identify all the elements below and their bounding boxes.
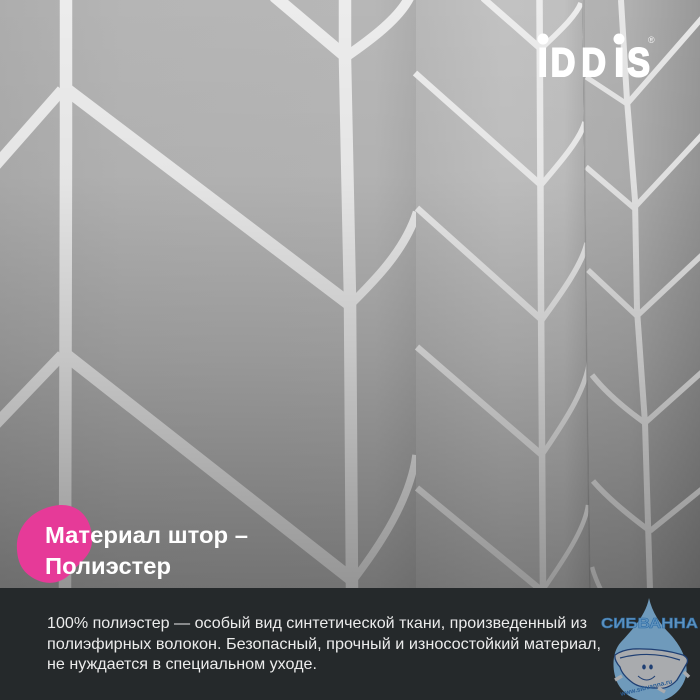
icon: smiling bathtub	[615, 649, 689, 692]
heading text	[45, 522, 248, 579]
logo: iddis	[538, 34, 655, 85]
body description text: не нуждается в специальном уходе.	[47, 656, 317, 673]
body description text: полиэфирных волокон. Безопасный, прочный и износостойкий материал,	[47, 636, 601, 653]
website address: www.sibvanna.ru	[619, 678, 673, 698]
panel: left curtain fold	[0, 0, 417, 590]
logo wordmark: I	[538, 39, 547, 85]
logo wordmark: D	[581, 39, 606, 85]
watermark: Сибванна logo	[601, 598, 699, 700]
bottom dark information band	[0, 588, 700, 700]
body description text: 100% полиэстер — особый вид синтетической ткани, произведенный из	[47, 615, 587, 632]
logo wordmark: S	[627, 39, 650, 85]
heading with pink blob	[17, 505, 248, 583]
registered mark: ®	[648, 35, 655, 45]
icon: water drop	[613, 598, 687, 700]
icon: pink blob accent	[17, 505, 92, 583]
panel: right curtain fold	[582, 0, 700, 590]
logo wordmark: I	[615, 39, 624, 85]
body description text	[47, 615, 601, 673]
brand name: СИБВАННА	[601, 616, 699, 632]
heading text: Полиэстер	[45, 553, 171, 579]
logo wordmark: D	[551, 39, 575, 85]
panel: middle curtain fold	[415, 0, 590, 590]
heading text: Материал штор –	[45, 522, 248, 548]
